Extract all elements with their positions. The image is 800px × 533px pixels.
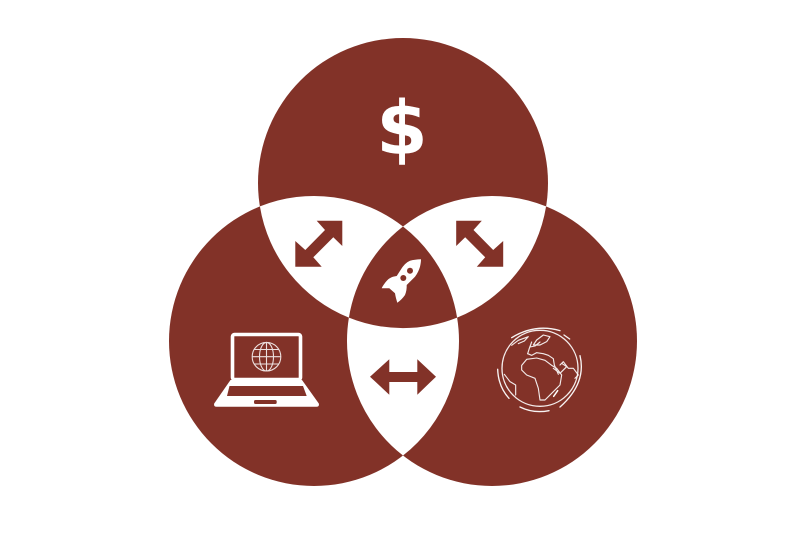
arrow: horizontal bottom overlap (370, 359, 436, 395)
arrow: diagonal top-right overlap (456, 221, 503, 267)
circle: top (258, 38, 548, 328)
icon: earth globe (498, 328, 581, 412)
icon: rocket (382, 259, 421, 303)
overlap: top and left (260, 196, 403, 318)
circle: right (347, 196, 637, 486)
circle: left (169, 196, 459, 486)
overlap: top and right (403, 196, 546, 318)
overlap: left and right (347, 318, 459, 456)
icon: dollar sign: $ (376, 86, 428, 172)
arrow: diagonal top-left overlap (295, 221, 342, 267)
icon: laptop with globe (214, 334, 319, 407)
